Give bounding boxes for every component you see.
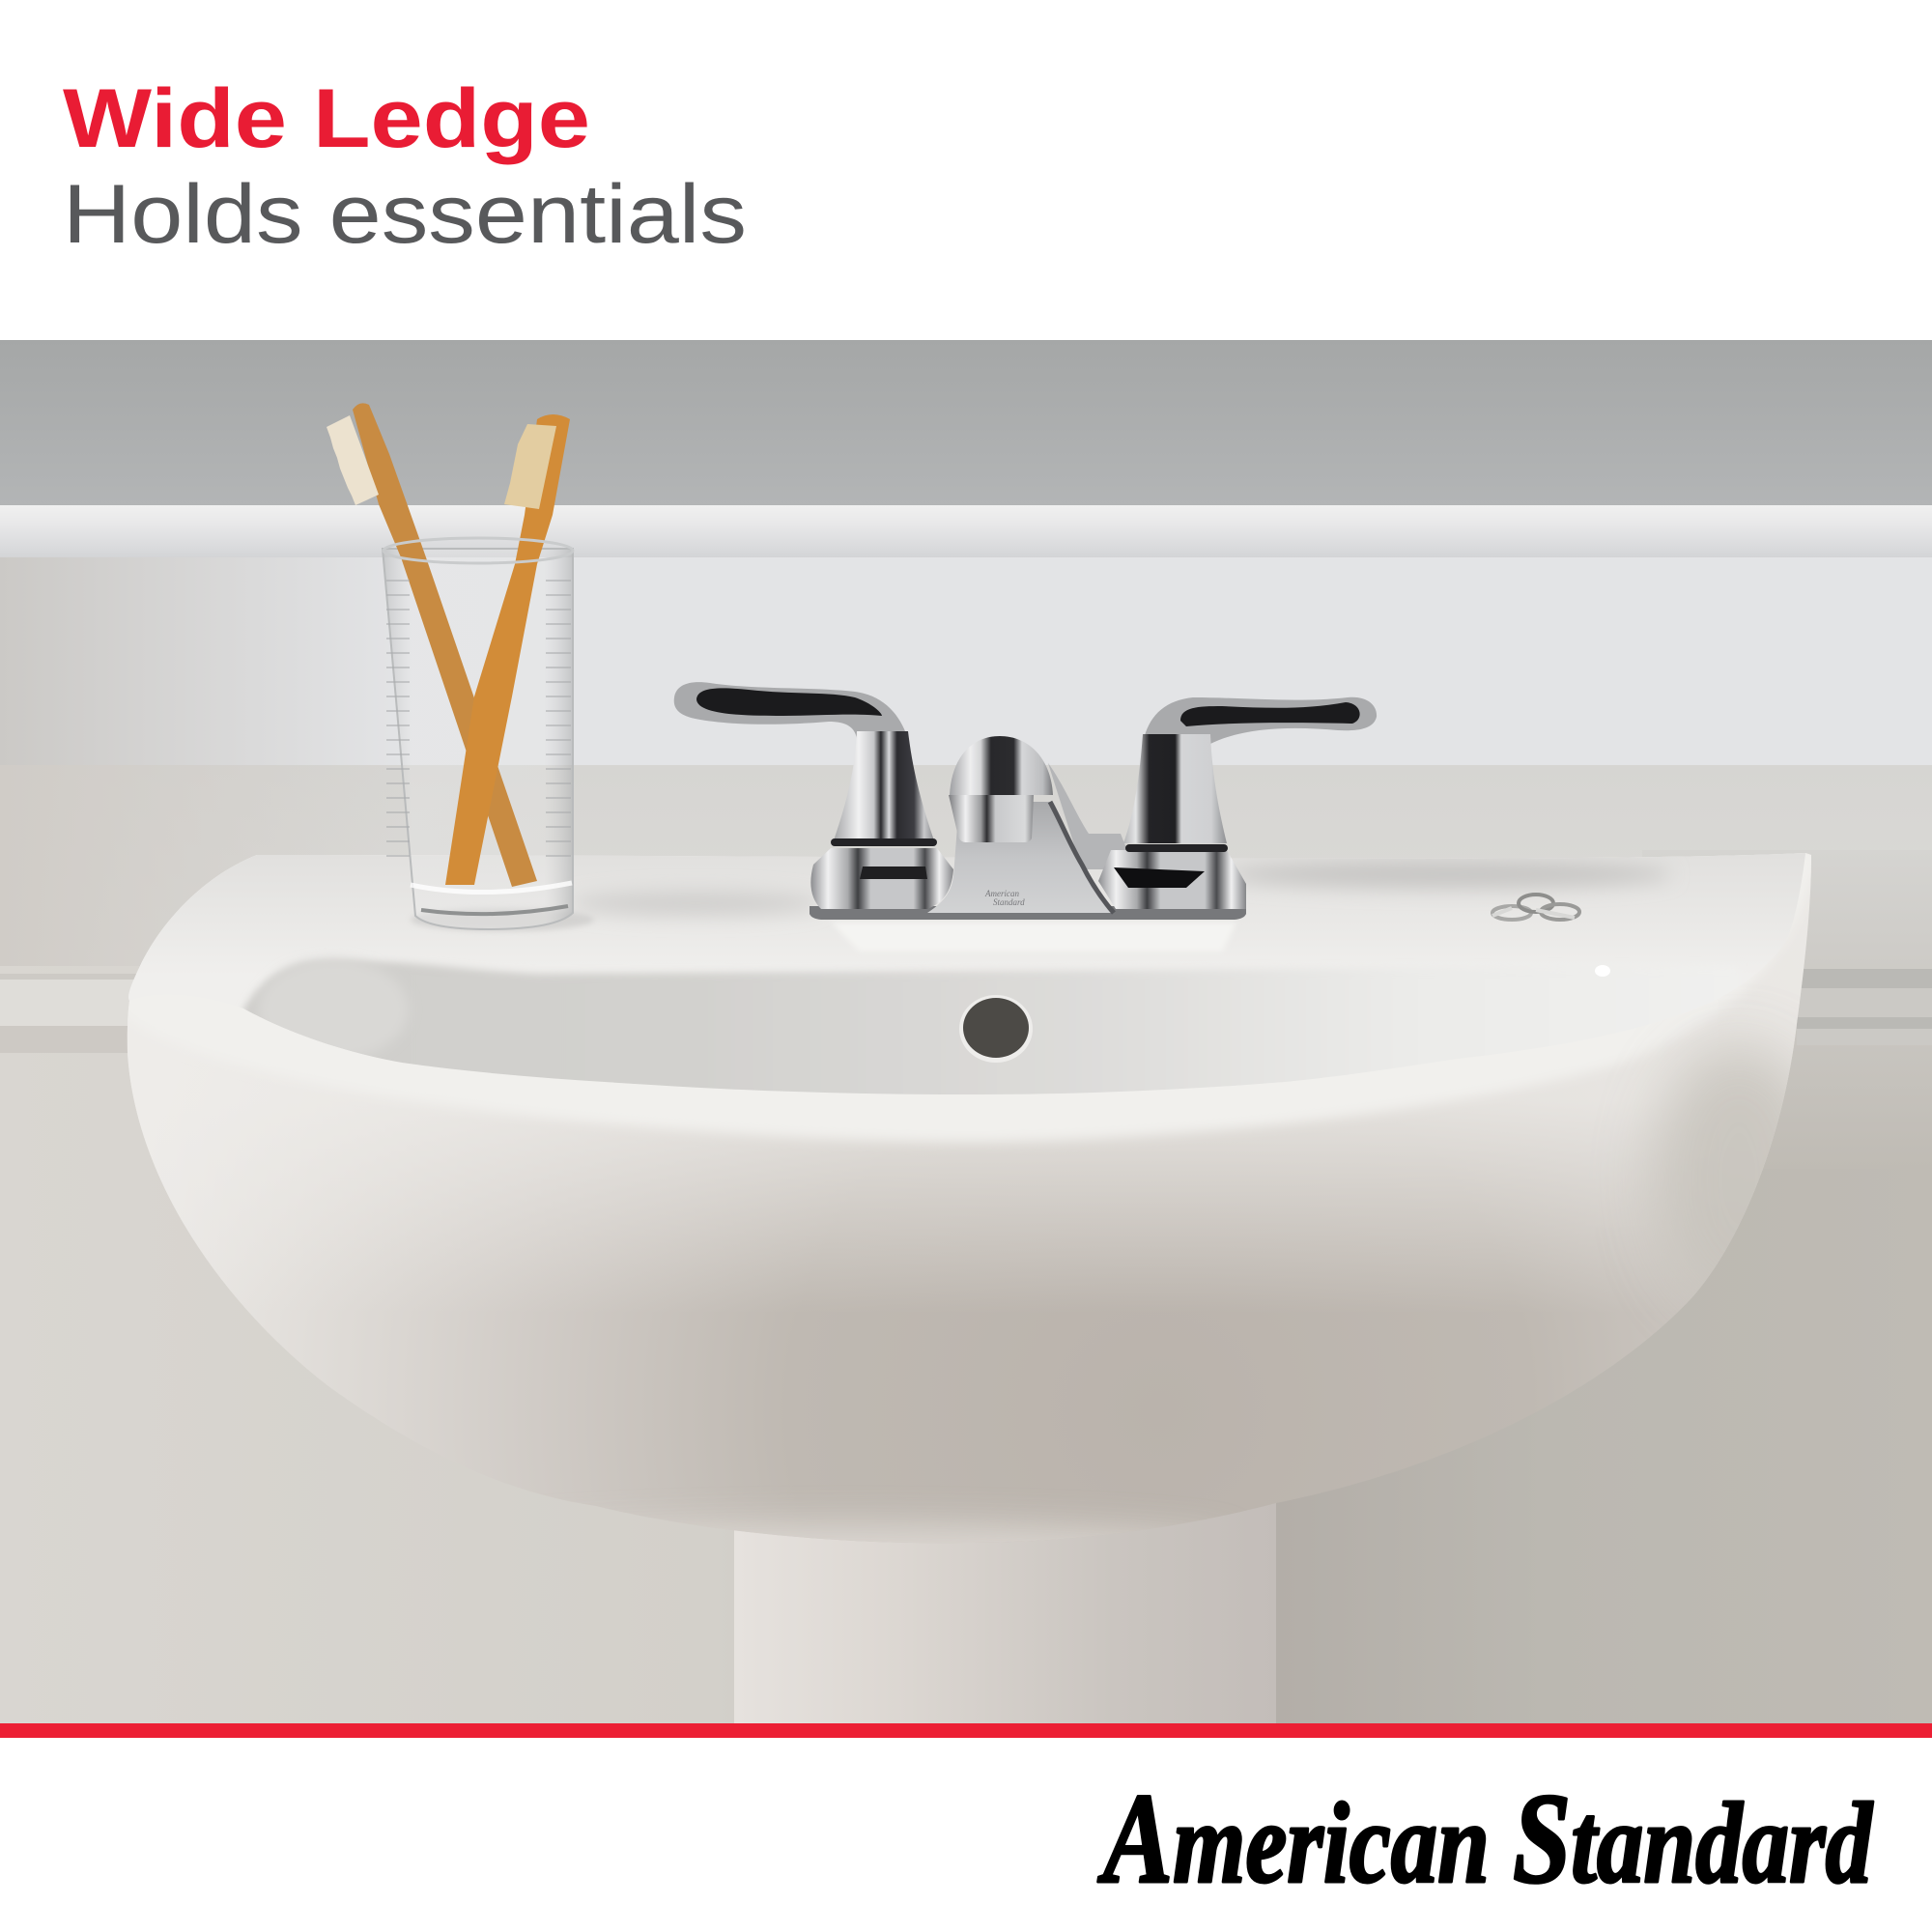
ledge: [128, 853, 1805, 1001]
spout: [949, 736, 1053, 842]
sink ledge and basin surface: [128, 853, 1805, 1094]
glass with toothbrushes: [327, 403, 594, 931]
heading: Wide Ledge: Wide Ledge: [63, 72, 590, 165]
right handle: [1098, 697, 1377, 909]
subheading: Holds essentials: Holds essentials: [63, 168, 747, 261]
counter behind sink: [0, 765, 1932, 966]
faucet base plate: [810, 802, 1246, 920]
brush 2 bristles: [504, 424, 556, 509]
front rim highlight: [420, 986, 1741, 1144]
overflow bump: [264, 968, 401, 1051]
lower bowl glow: [672, 1513, 1176, 1544]
basin interior: [242, 958, 1333, 1094]
glass body back: [383, 549, 573, 929]
brush 1 bristles: [327, 415, 379, 505]
small logo on plate: American: [984, 889, 1019, 898]
photo: wall-mounted sink scene: [0, 340, 1932, 1729]
red footer bar: [0, 1723, 1932, 1738]
glass front details: [384, 538, 573, 914]
sink bowl: [97, 850, 1835, 1574]
brush 1 handle: [353, 403, 537, 887]
faucet reflection: [838, 923, 1233, 949]
right side shade: [1640, 1028, 1793, 1275]
logo: American Standard: American Standard: [1097, 1767, 1874, 1910]
left handle: [674, 682, 953, 909]
small logo on plate: [985, 891, 1025, 905]
glare on right ledge: [1595, 965, 1610, 977]
upper grey wall: [0, 340, 1932, 506]
small logo on plate: Standard: [993, 897, 1025, 907]
glass shadow: [411, 908, 594, 931]
shadow behind faucet: [570, 892, 821, 915]
shadow on right ledge: [1227, 861, 1671, 888]
brush 2 handle: [445, 414, 570, 885]
overflow drain: [959, 995, 1033, 1063]
backsplash panel: [0, 557, 1932, 766]
faucet: [674, 682, 1377, 952]
lower wall with chair rail: [0, 850, 1932, 1729]
white wall moulding: [0, 505, 1932, 559]
rear neck: [1048, 763, 1126, 869]
pedestal: [734, 1488, 1276, 1729]
jewellery rings on ledge: [1492, 895, 1579, 920]
